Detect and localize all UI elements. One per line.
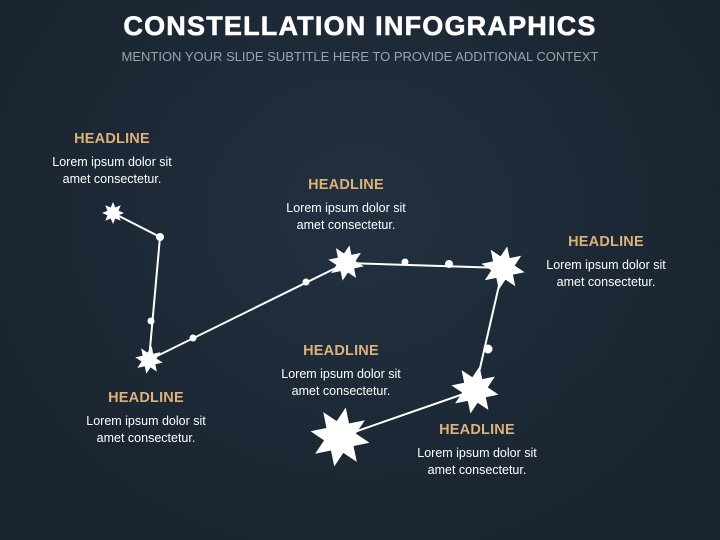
text 2 — [86, 390, 206, 445]
text 1: amet consectetur. — [63, 172, 161, 186]
text 1: Lorem ipsum dolor sit — [52, 155, 172, 169]
star 1 — [102, 202, 124, 224]
text 4: amet consectetur. — [557, 275, 655, 289]
star 3 — [325, 242, 367, 284]
star 5 — [447, 362, 503, 418]
text 6: Lorem ipsum dolor sit — [417, 446, 537, 460]
text 5: HEADLINE — [303, 343, 379, 359]
text 6: amet consectetur. — [428, 463, 526, 477]
text 2: Lorem ipsum dolor sit — [86, 414, 206, 428]
text 1 — [52, 131, 172, 186]
text 4: Lorem ipsum dolor sit — [546, 258, 666, 272]
star 2 — [133, 344, 165, 376]
text 4 — [546, 234, 666, 289]
text 5: amet consectetur. — [292, 384, 390, 398]
text 1: HEADLINE — [74, 131, 150, 147]
text 3: HEADLINE — [308, 177, 384, 193]
text 4: HEADLINE — [568, 234, 644, 250]
star 4 — [477, 242, 529, 294]
text 5 — [281, 343, 401, 398]
text 3: Lorem ipsum dolor sit — [286, 201, 406, 215]
title: CONSTELLATION INFOGRAPHICS — [123, 11, 597, 41]
text 6 — [417, 422, 537, 477]
text 2: amet consectetur. — [97, 431, 195, 445]
text 3 — [286, 177, 406, 232]
text 3: amet consectetur. — [297, 218, 395, 232]
text 5: Lorem ipsum dolor sit — [281, 367, 401, 381]
text 2: HEADLINE — [108, 390, 184, 406]
text 6: HEADLINE — [439, 422, 515, 438]
subtitle: MENTION YOUR SLIDE SUBTITLE HERE TO PROVIDE ADDITIONAL CONTEXT — [122, 49, 598, 64]
star 6 — [305, 402, 375, 472]
